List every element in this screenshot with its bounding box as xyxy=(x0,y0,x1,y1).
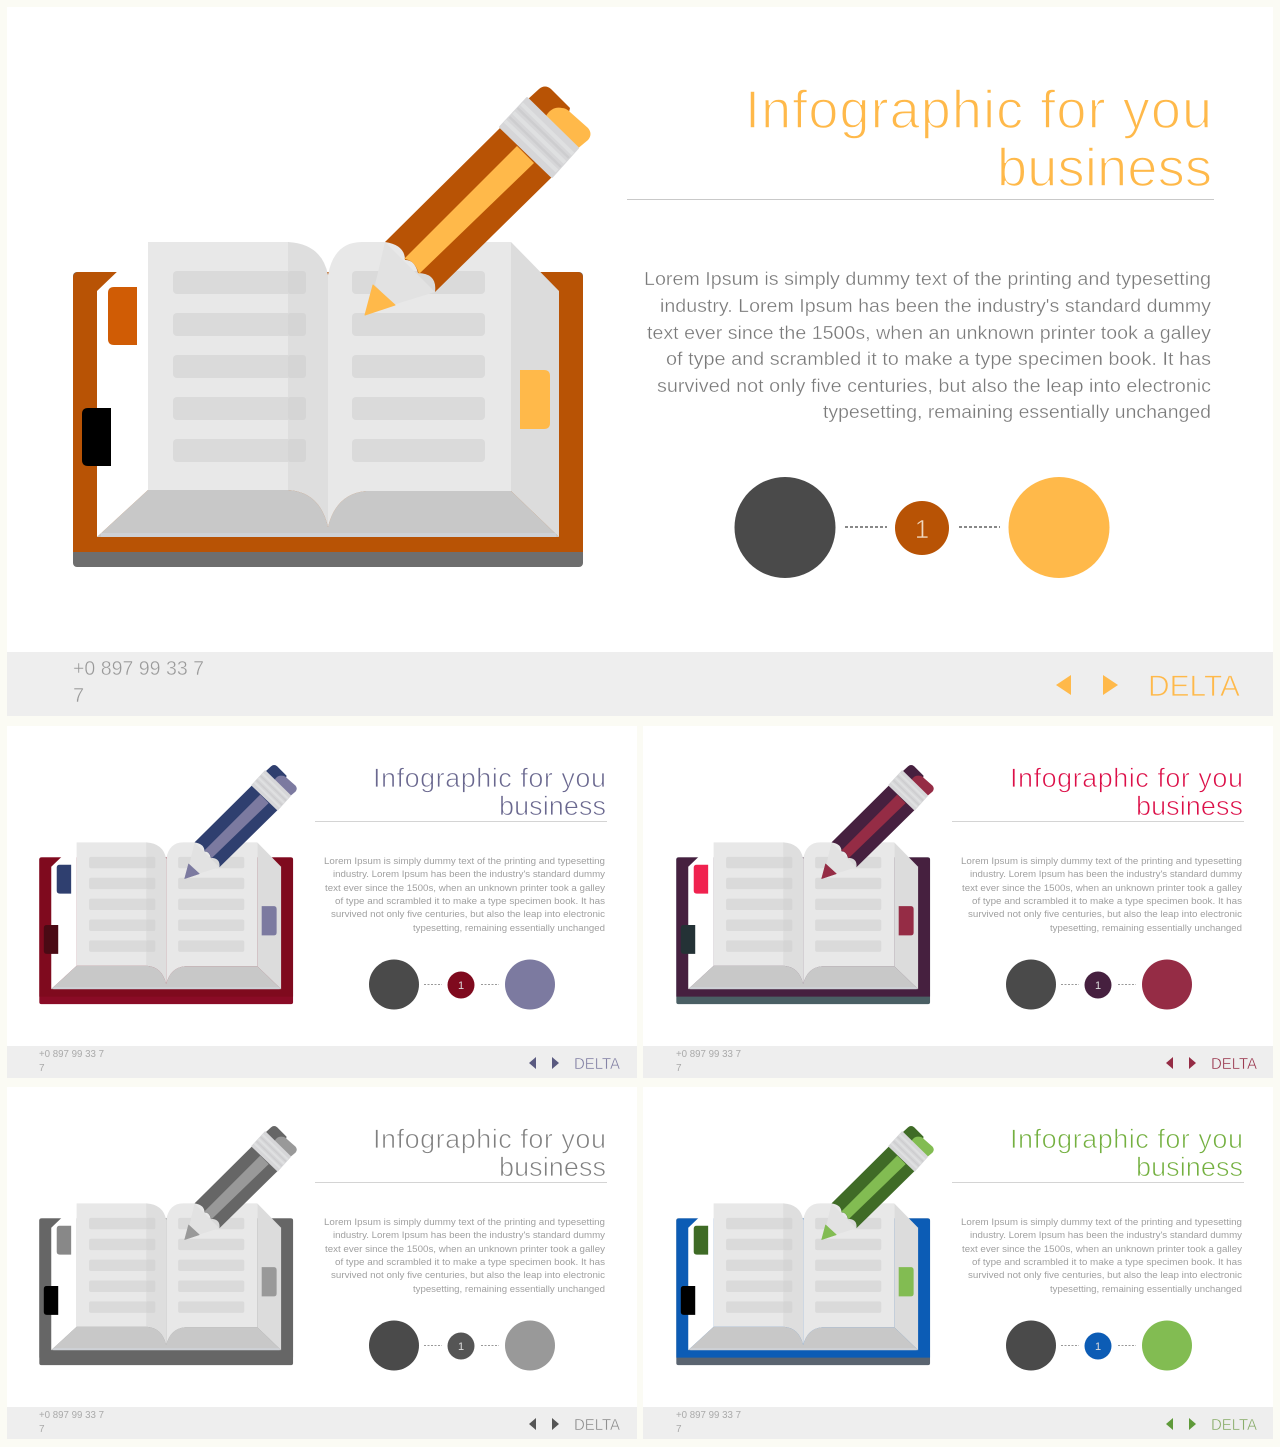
body text: survived not only five centuries, but also the leap into electronic xyxy=(331,1270,606,1280)
footer: +0 897 99 33 7 xyxy=(39,1410,104,1421)
footer xyxy=(7,1407,637,1439)
body text xyxy=(324,856,606,933)
title rule xyxy=(627,199,1214,200)
title: Infographic for you xyxy=(373,1124,606,1154)
pencil stripe xyxy=(404,146,534,274)
main body text xyxy=(644,269,1211,422)
title: business xyxy=(1136,1152,1243,1182)
white left page edge xyxy=(97,242,148,537)
panel: plum and crimson variant xyxy=(643,726,1273,1078)
footer: +0 897 99 33 7 xyxy=(39,1049,104,1060)
title: Infographic for you xyxy=(1010,1124,1243,1154)
pencil body xyxy=(385,128,552,292)
book cover xyxy=(73,272,583,567)
body text: text ever since the 1500s, when an unknown printer took a galley xyxy=(962,883,1243,893)
circles: 1 xyxy=(458,1341,464,1353)
body text: industry. Lorem Ipsum has been the industry's standard dummy xyxy=(333,869,606,879)
main title: business xyxy=(997,138,1212,198)
body text: Lorem Ipsum is simply dummy text of the printing and typesetting xyxy=(961,856,1242,866)
circles: 1 xyxy=(1095,980,1101,992)
body text: of type and scrambled it to make a type specimen book. It has xyxy=(972,896,1243,906)
pencil wood cone xyxy=(375,242,435,305)
text lines left xyxy=(173,271,306,462)
book bottom page block xyxy=(97,490,559,537)
title: Infographic for you xyxy=(1010,763,1243,793)
bookmark tab lower left xyxy=(82,408,111,466)
footer: +0 897 99 33 7 xyxy=(676,1410,741,1421)
footer bar xyxy=(7,652,1273,716)
title xyxy=(1010,763,1243,821)
brand name: DELTA xyxy=(1148,670,1240,703)
text lines right xyxy=(352,271,485,462)
illustration xyxy=(676,1126,934,1365)
footer: DELTA xyxy=(1211,1417,1257,1434)
circles: 1 xyxy=(1095,1341,1101,1353)
body text: industry. Lorem Ipsum has been the industry's standard dummy xyxy=(970,869,1243,879)
body text: text ever since the 1500s, when an unknown printer took a galley xyxy=(325,883,606,893)
footer: 7 xyxy=(39,1063,45,1074)
bookmark tab top left xyxy=(108,287,137,345)
illustration xyxy=(676,765,934,1004)
body text: industry. Lorem Ipsum has been the industry's standard dummy xyxy=(333,1230,606,1240)
body text xyxy=(961,856,1243,933)
circles xyxy=(369,960,555,1010)
circles xyxy=(1006,1320,1192,1370)
illustration xyxy=(39,1126,297,1365)
body text: typesetting, remaining essentially unchanged xyxy=(413,1284,605,1294)
pencil eraser xyxy=(527,86,590,150)
body text: survived not only five centuries, but also the leap into electronic xyxy=(968,909,1243,919)
illustration xyxy=(39,765,297,1004)
grey right page edge xyxy=(511,242,559,537)
body text: of type and scrambled it to make a type specimen book. It has xyxy=(972,1257,1243,1267)
footer xyxy=(643,1407,1273,1439)
main body text: industry. Lorem Ipsum has been the industry's standard dummy xyxy=(660,296,1211,316)
footer: +0 897 99 33 7 xyxy=(676,1049,741,1060)
main body text: Lorem Ipsum is simply dummy text of the printing and typesetting xyxy=(644,269,1211,289)
left page xyxy=(148,242,328,527)
circles xyxy=(1006,960,1192,1010)
main body text: survived not only five centuries, but also the leap into electronic xyxy=(657,376,1211,396)
body text: Lorem Ipsum is simply dummy text of the printing and typesetting xyxy=(961,1217,1242,1227)
circle step diagram: 1 xyxy=(915,514,929,544)
title: business xyxy=(499,1152,606,1182)
title: Infographic for you xyxy=(373,763,606,793)
body text: text ever since the 1500s, when an unknown printer took a galley xyxy=(962,1244,1243,1254)
panel: main slide xyxy=(7,7,1273,716)
body text: industry. Lorem Ipsum has been the industry's standard dummy xyxy=(970,1230,1243,1240)
body text: typesetting, remaining essentially unchanged xyxy=(1050,1284,1242,1294)
title xyxy=(373,1124,606,1182)
phone number: 7 xyxy=(73,685,84,707)
body text: text ever since the 1500s, when an unknown printer took a galley xyxy=(325,1244,606,1254)
circles xyxy=(369,1320,555,1370)
main body text: of type and scrambled it to make a type specimen book. It has xyxy=(666,349,1211,369)
footer xyxy=(7,1046,637,1078)
footer: 7 xyxy=(676,1063,682,1074)
footer: 7 xyxy=(676,1424,682,1435)
phone number xyxy=(73,658,204,707)
footer: DELTA xyxy=(574,1417,620,1434)
panel: navy and red variant xyxy=(7,726,637,1078)
body text: survived not only five centuries, but also the leap into electronic xyxy=(331,909,606,919)
footer xyxy=(643,1046,1273,1078)
body text: survived not only five centuries, but also the leap into electronic xyxy=(968,1270,1243,1280)
illustration: open book with pencil xyxy=(73,86,590,567)
circles: 1 xyxy=(458,980,464,992)
pencil xyxy=(365,86,590,315)
panel: blue and green variant xyxy=(643,1087,1273,1439)
title: business xyxy=(499,791,606,821)
body text: Lorem Ipsum is simply dummy text of the printing and typesetting xyxy=(324,1217,605,1227)
body text: typesetting, remaining essentially unchanged xyxy=(413,923,605,933)
body text: of type and scrambled it to make a type specimen book. It has xyxy=(335,1257,606,1267)
phone number: +0 897 99 33 7 xyxy=(73,658,204,680)
footer: 7 xyxy=(39,1424,45,1435)
main title: Infographic for you xyxy=(745,80,1212,140)
title: business xyxy=(1136,791,1243,821)
main body text: text ever since the 1500s, when an unknown printer took a galley xyxy=(647,323,1211,343)
pencil lead tip xyxy=(365,285,395,315)
arrows xyxy=(1056,675,1118,695)
body text: typesetting, remaining essentially unchanged xyxy=(1050,923,1242,933)
pencil ferrule xyxy=(500,98,578,177)
bookmark tab right xyxy=(520,370,550,429)
body text: Lorem Ipsum is simply dummy text of the printing and typesetting xyxy=(324,856,605,866)
main title xyxy=(745,80,1212,198)
main body text: typesetting, remaining essentially unchanged xyxy=(823,402,1211,422)
body text: of type and scrambled it to make a type specimen book. It has xyxy=(335,896,606,906)
footer: DELTA xyxy=(1211,1056,1257,1073)
title xyxy=(1010,1124,1243,1182)
panel: grey variant xyxy=(7,1087,637,1439)
footer: DELTA xyxy=(574,1056,620,1073)
circle step diagram xyxy=(734,477,1110,578)
body text xyxy=(324,1217,606,1294)
title xyxy=(373,763,606,821)
right page xyxy=(328,242,511,527)
body text xyxy=(961,1217,1243,1294)
